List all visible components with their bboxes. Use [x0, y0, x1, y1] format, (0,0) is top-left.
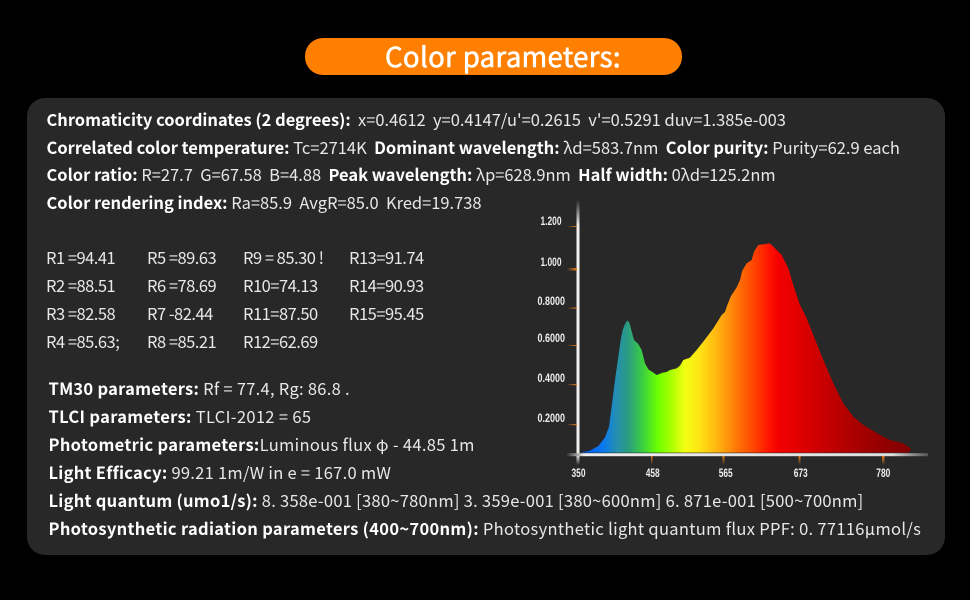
area: spectrum curve [580, 243, 911, 453]
x axis labels [572, 468, 890, 480]
title [305, 38, 682, 75]
table: R values [46, 244, 424, 352]
y axis labels: 0.4000 [538, 373, 565, 385]
x axis labels: 780 [876, 468, 890, 480]
text: light quantum: Light quantum (umo1/s): 8. 358e-001 [380~780nm] 3. 359e-001 [380~600nm] 6. 871e-001 [500~700nm] [48, 488, 864, 512]
text: color temperature: Correlated color temperature: Tc=2714K Dominant wavelength: λd=583.7nm Color purity: Purity=62.9 each [46, 134, 900, 158]
y axis labels: 0.2000 [538, 413, 565, 425]
table: R values: R6 =78.69 [147, 272, 216, 296]
text: photosynthetic radiation: Photosynthetic radiation parameters (400~700nm): Photosynthetic light quantum flux PPF: 0. 77116μmol/s [48, 516, 921, 540]
table: R values: R13=91.74 [349, 244, 424, 268]
table: R values: R7 -82.44 [147, 300, 213, 324]
axes [566, 200, 928, 465]
text: chromaticity: Chromaticity coordinates (2 degrees): x=0.4612 y=0.4147/u'=0.2615 v'=0.5291 duv=1.385e-003 [46, 106, 786, 130]
y axis labels: 0.6000 [538, 333, 565, 345]
text: color rendering index: Color rendering index: Ra=85.9 AvgR=85.0 Kred=19.738 [46, 190, 482, 214]
y axis labels [538, 216, 565, 425]
y axis labels: 1.200 [540, 216, 562, 228]
table: R values: R14=90.93 [349, 272, 424, 296]
title: Color parameters: [385, 34, 621, 74]
table: R values: R1 =94.41 [46, 244, 115, 268]
x axis labels: 350 [572, 468, 586, 480]
x axis labels: 458 [646, 468, 660, 480]
table: R values: R3 =82.58 [46, 300, 115, 324]
table: R values: R2 =88.51 [46, 272, 115, 296]
x axis labels: 673 [794, 468, 808, 480]
text: light efficacy: Light Efficacy: 99.21 1m/W in e = 167.0 mW [48, 460, 391, 484]
y axis labels: 0.8000 [538, 296, 565, 308]
text: color ratio: Color ratio: R=27.7 G=67.58 B=4.88 Peak wavelength: λp=628.9nm Half width: 0λd=125.2nm [46, 162, 776, 186]
x axis labels: 565 [719, 468, 733, 480]
table: R values: R11=87.50 [243, 300, 318, 324]
table: R values: R10=74.13 [243, 272, 318, 296]
text: TM30: TM30 parameters: Rf = 77.4, Rg: 86.8 . [48, 376, 350, 400]
text: TLCI: TLCI parameters: TLCI-2012 = 65 [48, 404, 311, 428]
table: R values: R15=95.45 [349, 300, 424, 324]
table: R values: R5 =89.63 [147, 244, 216, 268]
table: R values: R4 =85.63; [46, 328, 119, 352]
text: photometric: Photometric parameters:Luminous flux φ - 44.85 1m [48, 432, 475, 456]
panel: parameters [27, 98, 945, 555]
table: R values: R12=62.69 [243, 328, 318, 352]
y axis labels: 1.000 [540, 257, 562, 269]
table: R values: R9 = 85.30 ! [243, 244, 323, 268]
table: R values: R8 =85.21 [147, 328, 216, 352]
